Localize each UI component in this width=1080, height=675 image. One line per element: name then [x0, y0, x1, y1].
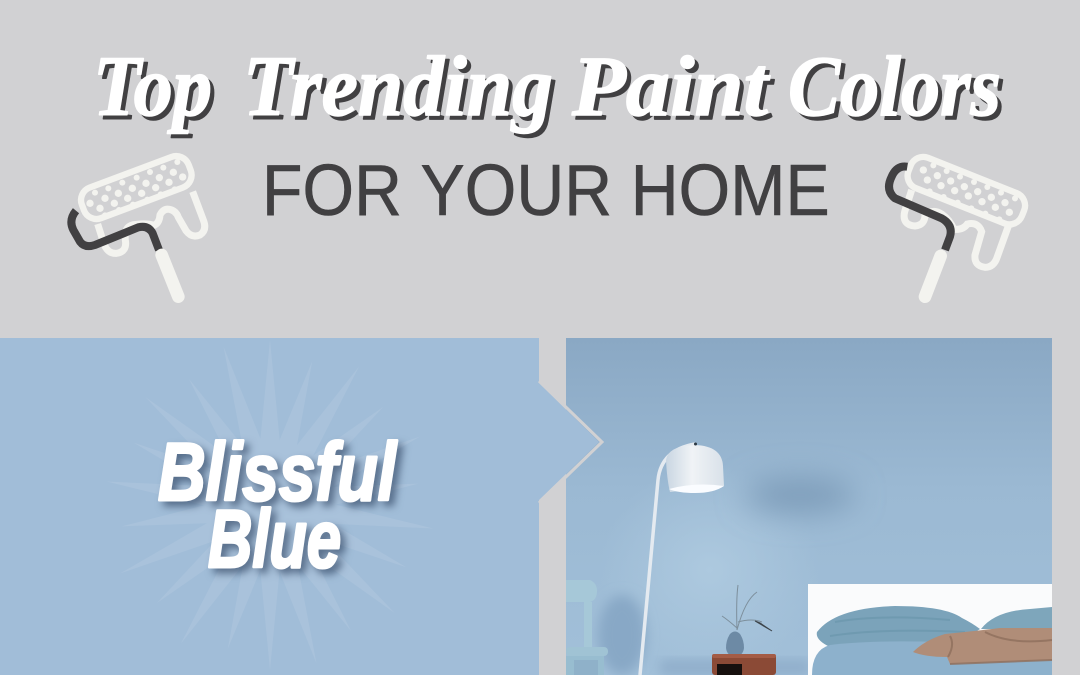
chevron arrow: [539, 381, 602, 503]
title: top trending paint colors: Trending: [243, 38, 553, 134]
icon: right paint roller: [889, 153, 1029, 297]
chair: [566, 580, 608, 675]
heading: blissful blue: Blissful: [158, 427, 398, 518]
subtitle: for your home: FOR YOUR HOME: [262, 149, 830, 231]
title: top trending paint colors: Colors: [788, 38, 1001, 134]
floor lamp: [640, 442, 724, 675]
bed: [808, 584, 1052, 675]
photo: blue bedroom: [566, 338, 1052, 675]
title: top trending paint colors: Paint: [571, 38, 771, 134]
title: top trending paint colors: Top: [93, 38, 212, 134]
panel: blissful blue: [0, 338, 602, 675]
title: top trending paint colors: [93, 38, 1001, 134]
starburst: [104, 340, 436, 670]
heading: blissful blue: [158, 427, 398, 585]
side table with vase: [712, 585, 776, 675]
heading: blissful blue: Blue: [208, 494, 341, 585]
icon: left paint roller: [71, 152, 205, 297]
